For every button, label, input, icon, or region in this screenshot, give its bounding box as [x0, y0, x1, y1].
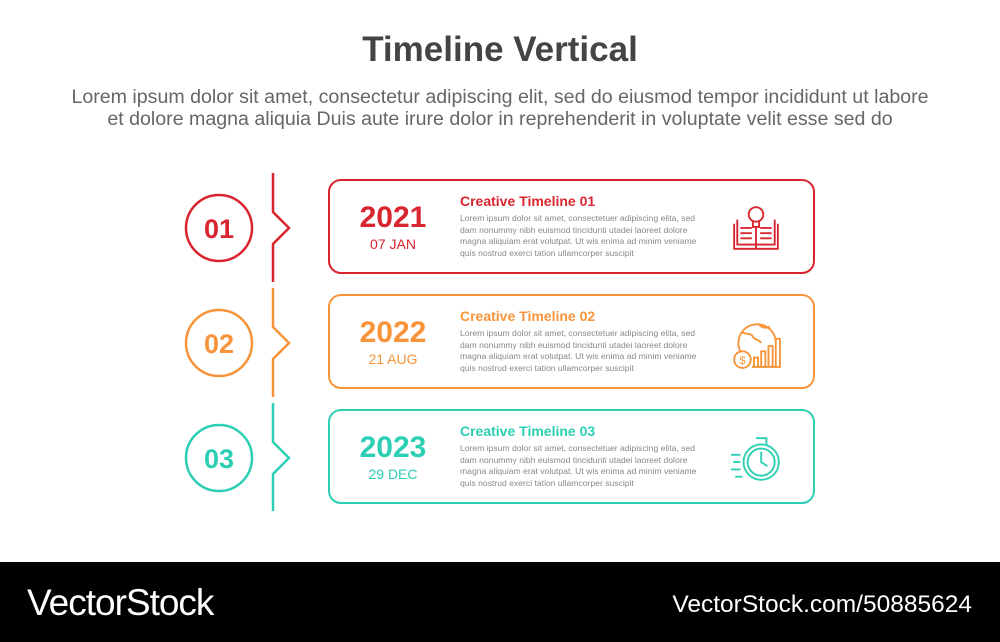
- panel: timeline 03: [328, 409, 815, 504]
- panel: timeline 02: [328, 294, 815, 389]
- panel: timeline 03: 2023: [360, 431, 426, 464]
- panel: timeline 02: 2022: [360, 316, 426, 349]
- footer bar: [0, 562, 1000, 642]
- footer bar: VectorStock: [27, 582, 213, 623]
- marker 02: [186, 288, 289, 397]
- icon: globe money chart: $: [739, 355, 746, 367]
- marker 01: [186, 173, 289, 282]
- panel: timeline 03: Lorem ipsum dolor sit amet, consectetuer adipiscing elita, sed dam nonummy nibh euismod tincidunti utadei laoreet dolore magna aliquiam erat volutpat. Ut wis enima ad minim veniame quis nostrud exerci tation ullamcorper suscipit: [460, 443, 696, 488]
- panel: timeline 01: 07 JAN: [370, 236, 416, 252]
- icon: globe money chart: [733, 323, 781, 369]
- icon: book with bulb: [733, 206, 779, 250]
- panel: timeline 03: 29 DEC: [368, 466, 418, 482]
- panel: timeline 02: Lorem ipsum dolor sit amet, consectetuer adipiscing elita, sed dam nonummy nibh euismod tincidunti utadei laoreet dolore magna aliquiam erat volutpat. Ut wis enima ad minim veniame quis nostrud exerci tation ullamcorper suscipit: [460, 328, 696, 373]
- panel: timeline 03: Creative Timeline 03: [460, 423, 595, 439]
- subtitle: et dolore magna aliquia Duis aute irure dolor in reprehenderit in voluptate velit esse sed do: [107, 108, 893, 130]
- marker 02: 02: [204, 329, 234, 359]
- subtitle: Lorem ipsum dolor sit amet, consectetur adipiscing elit, sed do eiusmod tempor incididunt ut labore: [71, 86, 929, 108]
- panel: timeline 01: Lorem ipsum dolor sit amet, consectetuer adipiscing elita, sed dam nonummy nibh euismod tincidunti utadei laoreet dolore magna aliquiam erat volutpat. Ut wis enima ad minim veniame quis nostrud exerci tation ullamcorper suscipit: [460, 213, 696, 258]
- panel: timeline 02: Creative Timeline 02: [460, 308, 595, 324]
- timeline markers: [184, 173, 291, 511]
- subtitle: [71, 86, 929, 130]
- title: Timeline Vertical: [362, 30, 638, 69]
- icon: stopwatch: [731, 437, 780, 481]
- panel: timeline 01: Creative Timeline 01: [460, 193, 595, 209]
- footer bar: VectorStock.com/50885624: [672, 591, 972, 618]
- panel: timeline 02: 21 AUG: [368, 351, 418, 367]
- marker 03: 03: [204, 444, 234, 474]
- panel: timeline 01: [328, 179, 815, 274]
- marker 03: [186, 403, 289, 511]
- panel: timeline 01: 2021: [360, 201, 426, 234]
- marker 01: 01: [204, 214, 234, 244]
